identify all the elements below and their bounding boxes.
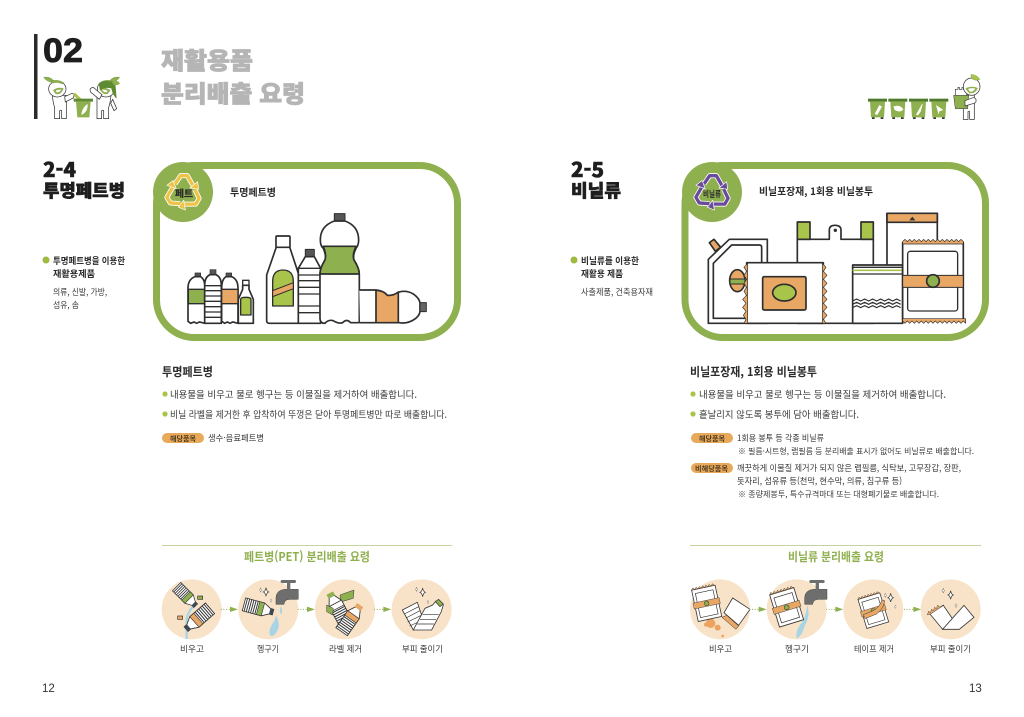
chapter bar [34, 34, 38, 119]
bullet 1 [690, 391, 696, 397]
applicable items pill [691, 433, 733, 443]
main title line 1: 재활용품 [161, 42, 253, 76]
vinyl recycle badge: 비닐류 [703, 188, 721, 200]
step 1: empty [690, 579, 750, 639]
note heading line 1: 투명페트병을 이용한 [53, 254, 126, 267]
products line 1: 의류, 신발, 가방, [53, 286, 107, 298]
excluded items line 2: 돗자리, 섬유류 등(천막, 현수막, 의류, 침구류 등) [737, 475, 902, 487]
small bottles [188, 270, 253, 323]
bottle illustration [188, 214, 426, 323]
arrow [904, 607, 921, 612]
applicable items pill: 해당품목 [170, 433, 196, 443]
note heading line 2: 재활용제품 [53, 267, 95, 280]
section heading 2-5 [571, 154, 621, 203]
bullet [42, 256, 50, 264]
instruction 2: 비닐 라벨을 제거한 후 압착하여 뚜껑은 닫아 투명페트병만 따로 배출합니다. [170, 407, 447, 421]
excluded items pill: 비해당품목 [695, 463, 728, 473]
text block: vinyl instructions [690, 363, 974, 500]
applicable items: 1회용 봉투 등 각종 비닐류 [737, 432, 824, 444]
PET recycle badge: 페트 [175, 186, 193, 200]
applicable note: ※ 필름·시트형, 랩필름 등 분리배출 표시가 없어도 비닐류로 배출합니다. [738, 446, 974, 457]
section heading 2-4 [43, 154, 125, 203]
recycled products note: vinyl [570, 254, 653, 298]
step 3: remove label [315, 579, 375, 639]
bullet 2 [162, 411, 168, 417]
instruction 1: 내용물을 비우고 물로 헹구는 등 이물질을 제거하여 배출합니다. [699, 387, 946, 401]
step label 2: 헹구기 [257, 642, 279, 655]
chapter header [34, 32, 305, 119]
arrow [749, 607, 767, 612]
lying bottle [359, 290, 426, 323]
large square bottle [267, 236, 298, 323]
divider [690, 545, 981, 546]
pouch [903, 239, 966, 323]
packaging illustration [708, 213, 966, 323]
instruction 1: 내용물을 비우고 물로 헹구는 등 이물질을 제거하여 배출합니다. [170, 387, 417, 401]
PET recycle badge [153, 162, 213, 222]
steps heading: 비닐류 분리배출 요령 [788, 548, 884, 565]
applicable items pill: 해당품목 [699, 433, 725, 443]
section name: 비닐류 [571, 178, 621, 203]
zip bag [853, 265, 903, 323]
subheading: 비닐포장재, 1회용 비닐봉투 [690, 363, 817, 380]
section number: 2-5 [571, 154, 604, 183]
steps: vinyl disposal [690, 545, 981, 655]
ribbed bottle [298, 249, 321, 323]
panel caption: 비닐포장재, 1회용 비닐봉투 [759, 183, 873, 198]
step 4: flatten [921, 579, 981, 639]
step 4: flatten [392, 579, 452, 639]
step label 3: 라벨 제거 [329, 642, 362, 655]
note heading line 2: 재활용 제품 [581, 267, 623, 280]
step label 3: 테이프 제거 [854, 642, 894, 655]
chapter number: 02 [43, 32, 83, 70]
subheading: 투명페트병 [162, 363, 213, 380]
arrow [826, 607, 843, 612]
instruction 2: 흩날리지 않도록 봉투에 담아 배출합니다. [699, 407, 859, 421]
arrow [374, 607, 391, 612]
note heading line 1: 비닐류를 이용한 [581, 254, 640, 267]
section number: 2-4 [43, 154, 76, 183]
step label 4: 부피 줄이기 [402, 642, 443, 655]
tall bag [887, 213, 937, 267]
excluded items line 1: 깨끗하게 이물질 제거가 되지 않은 랩필름, 식탁보, 고무장갑, 장판, [737, 462, 961, 474]
panel frame [685, 166, 986, 338]
step 3: remove tape [843, 579, 903, 639]
section name: 투명페트병 [43, 178, 125, 203]
step label 4: 부피 줄이기 [930, 642, 971, 655]
panel caption: 투명페트병 [230, 184, 276, 199]
panel: vinyl packaging [682, 162, 986, 338]
products line 2: 섬유, 솜 [53, 299, 79, 311]
recycled products note: PET [42, 254, 126, 311]
excluded note: ※ 종량제봉투, 특수규격마대 또는 대형폐기물로 배출합니다. [738, 489, 939, 500]
step drawings [162, 579, 452, 639]
bullet 2 [690, 411, 696, 417]
large round bottle [320, 214, 359, 323]
page number left: 12 [42, 683, 55, 695]
step 2: rinse [767, 579, 827, 639]
bullet [570, 256, 578, 264]
mascots with bin [44, 77, 120, 119]
applicable items pill [162, 433, 204, 443]
divider [162, 545, 452, 546]
shopping bag [797, 222, 873, 323]
applicable items: 생수·음료페트병 [208, 432, 264, 444]
steps heading: 페트병(PET) 분리배출 요령 [244, 548, 370, 565]
arrow [298, 607, 315, 612]
vinyl recycle badge [682, 162, 742, 222]
bullet 1 [162, 391, 168, 397]
step label 1: 비우고 [180, 642, 204, 655]
panel frame [156, 166, 458, 338]
steps: PET disposal [162, 545, 452, 655]
main title line 2: 분리배출 요령 [161, 75, 305, 109]
text block: PET instructions [162, 363, 447, 444]
step label 2: 헹구기 [785, 642, 809, 655]
products: 사출제품, 건축용자재 [581, 286, 653, 298]
jug [708, 239, 767, 323]
panel: PET bottles [153, 162, 458, 338]
step drawings [690, 579, 981, 639]
arrow [221, 607, 238, 612]
snack bag [743, 263, 827, 323]
page number right: 13 [969, 683, 982, 695]
step 1: empty [162, 579, 222, 639]
top-right bins and mascot [868, 75, 980, 119]
step label 1: 비우고 [709, 642, 732, 655]
step 2: rinse [238, 579, 298, 639]
